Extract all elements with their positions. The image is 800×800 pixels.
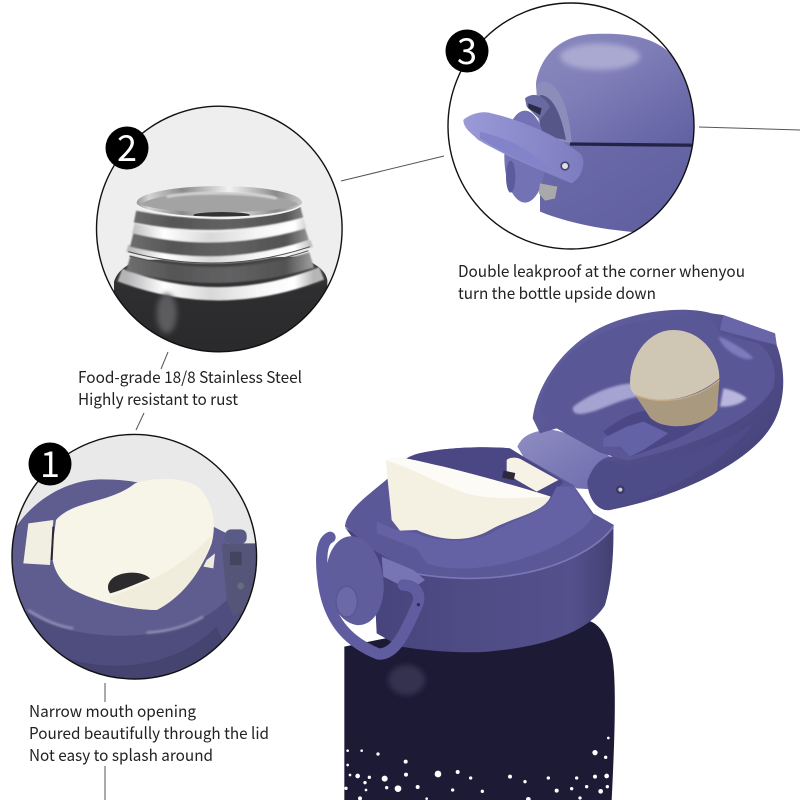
rubber stopper [630, 330, 719, 426]
hinge arm with rivet [587, 423, 753, 510]
caption 1: Poured beautifully through the lid [29, 720, 269, 744]
hinge [517, 430, 610, 490]
caption 2: Food-grade 18/8 Stainless Steel [78, 364, 302, 388]
lid dome [536, 34, 703, 144]
caption 1 [29, 698, 269, 766]
detail circle 3: leakproof latch [463, 34, 694, 232]
caption 1: Narrow mouth opening [29, 698, 196, 722]
star dots [344, 737, 610, 800]
latch arm [463, 112, 583, 183]
neck metal bands [120, 212, 322, 294]
badge 2 [106, 120, 148, 172]
badge 1: 1 [40, 436, 60, 488]
detail circle 2: stainless steel [97, 106, 342, 367]
push button and strap [321, 532, 425, 654]
recess [536, 82, 572, 143]
bottle cap [345, 447, 614, 652]
dark bottle shoulder [114, 256, 328, 352]
badge 1 [28, 436, 72, 488]
detail circle 1: narrow mouth [12, 435, 256, 678]
strap ring [504, 111, 546, 203]
connector lines [105, 127, 800, 800]
circle 1 outline [12, 434, 257, 679]
badge 3: 3 [457, 23, 477, 75]
circle 3 outline [448, 3, 694, 249]
badge 3 [446, 23, 488, 75]
white spout [23, 479, 215, 610]
rim opening [137, 186, 302, 219]
white spout insert [386, 458, 558, 539]
caption 2: Highly resistant to rust [78, 386, 238, 410]
flip lid [533, 310, 783, 510]
lid base [540, 143, 692, 232]
badge 2: 2 [117, 120, 137, 172]
caption 3: Double leakproof at the corner whenyou [458, 258, 745, 282]
circle 2 outline [96, 106, 342, 352]
caption 2 [78, 364, 302, 410]
caption 3 [458, 258, 745, 304]
bottle body [344, 620, 615, 800]
caption 1: Not easy to splash around [29, 742, 213, 766]
main product: open-lid bottle [321, 310, 783, 800]
caption 3: turn the bottle upside down [458, 280, 656, 304]
